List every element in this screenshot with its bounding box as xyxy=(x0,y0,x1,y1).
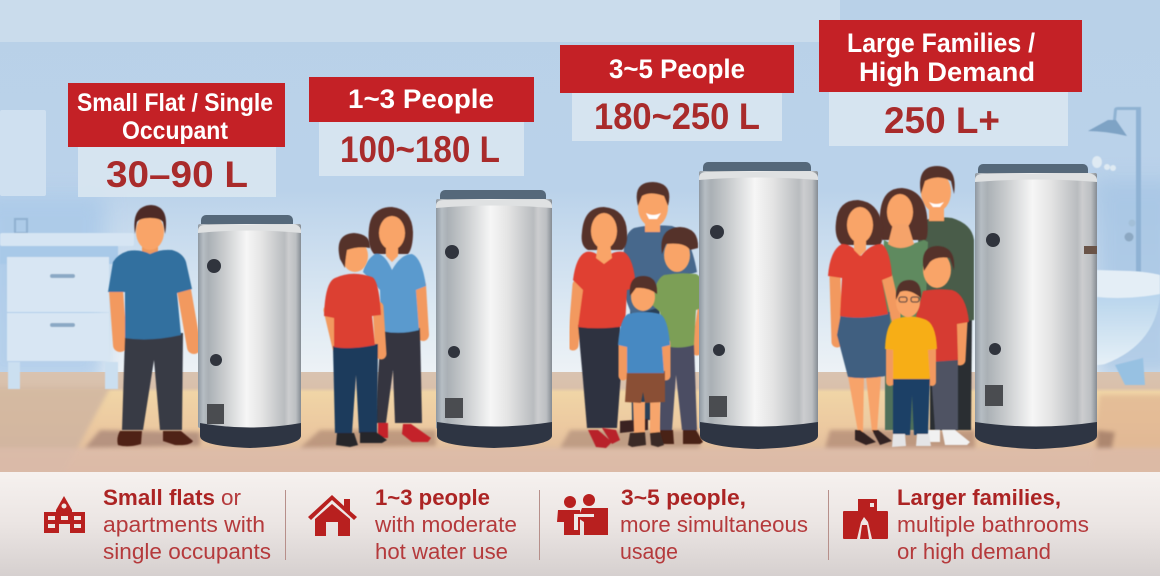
icon: family group xyxy=(557,494,608,535)
text: larger families: or high demand xyxy=(897,539,1051,564)
text: 3~5 people xyxy=(620,485,808,564)
text: 3~5 people: more simultaneous xyxy=(620,512,808,537)
mirror xyxy=(0,110,46,196)
heading banner: large families: High Demand xyxy=(859,57,1035,87)
bathtub xyxy=(1097,270,1160,385)
heading banner: small flat: Occupant xyxy=(122,117,229,145)
icon: house xyxy=(308,495,357,536)
icon: apartment building xyxy=(44,496,85,533)
person: mother xyxy=(573,207,636,448)
icon: large family building xyxy=(843,499,888,539)
person: man xyxy=(108,205,194,446)
group 2 xyxy=(309,77,552,448)
person: father xyxy=(918,166,974,430)
capacity: 100~180 L xyxy=(319,122,524,176)
capacity: 30-90 L xyxy=(78,147,276,197)
person: mother in red xyxy=(828,200,897,445)
person: small child xyxy=(618,276,670,447)
shower xyxy=(1088,107,1141,272)
group 4 xyxy=(819,20,1097,449)
capacity: 250 L+: 250 L+ xyxy=(884,100,1000,141)
group 1 xyxy=(68,83,301,448)
text: 1~3 people xyxy=(374,485,517,564)
heading banner: small flat: Small Flat / Single xyxy=(77,89,273,117)
person: woman xyxy=(363,207,431,442)
capacity: 180~250 L: 180~250 L xyxy=(594,96,760,137)
heading banner: small flat xyxy=(68,83,285,147)
text: 3~5 people: 3~5 people, xyxy=(621,485,746,510)
heading banner: 1~3 people: 1~3 People xyxy=(348,84,494,114)
heading banner: 3~5 people: 3~5 People xyxy=(609,54,745,84)
heading banner: large families xyxy=(819,20,1082,92)
person: mother with dark hair xyxy=(879,188,928,430)
heading banner: 3~5 people xyxy=(560,45,794,93)
person: boy in red xyxy=(916,246,970,445)
person: older boy xyxy=(652,227,708,444)
person: child with glasses xyxy=(885,280,937,447)
text: small flats xyxy=(103,485,271,564)
vanity cabinet xyxy=(0,219,134,389)
text: larger families xyxy=(897,485,1089,564)
text: larger families: Larger families, xyxy=(897,485,1061,510)
capacity: 100~180 L: 100~180 L xyxy=(340,129,500,170)
group 3 xyxy=(560,45,818,449)
bottom panel xyxy=(0,472,1160,576)
text: small flats: apartments with xyxy=(103,512,265,537)
person: father xyxy=(620,182,697,433)
heading banner: 1~3 people xyxy=(309,77,534,122)
water heater tank 250 L+ xyxy=(975,164,1097,449)
text: 1~3 people: 1~3 people xyxy=(375,485,490,510)
water heater tank 30-90 L xyxy=(198,215,301,448)
text: larger families: multiple bathrooms xyxy=(897,512,1089,537)
text: small flats: Small flats xyxy=(103,485,215,510)
text: small flats: or xyxy=(221,485,241,510)
text: 1~3 people: hot water use xyxy=(375,539,508,564)
text: 3~5 people: usage xyxy=(620,539,678,564)
person: child xyxy=(324,233,387,447)
text: small flats: single occupants xyxy=(103,539,271,564)
heading banner: large families: Large Families / xyxy=(847,28,1035,58)
glasses xyxy=(899,297,919,302)
water heater tank 180~250 L xyxy=(699,162,818,449)
water heater tank 100~180 L xyxy=(436,190,552,448)
capacity: 30-90 L: 30–90 L xyxy=(106,154,248,195)
text: 1~3 people: with moderate xyxy=(374,512,517,537)
capacity: 250 L+ xyxy=(829,92,1068,146)
